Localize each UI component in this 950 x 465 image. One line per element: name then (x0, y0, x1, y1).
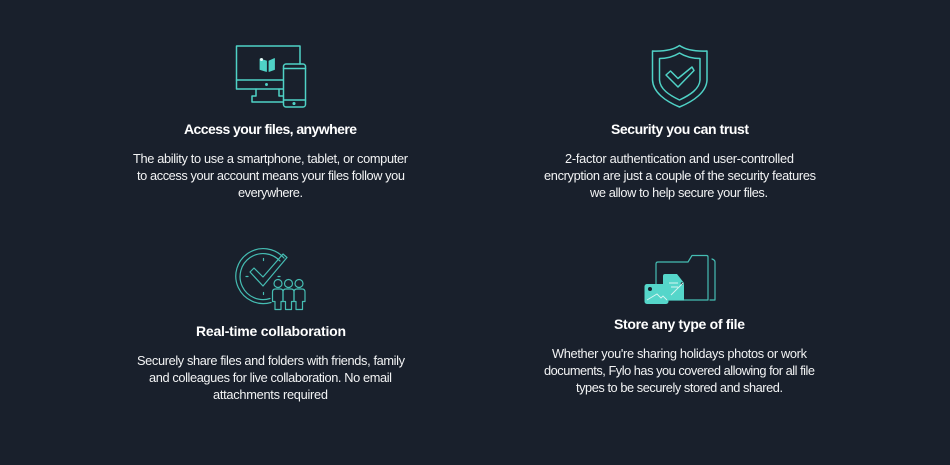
heading: Security you can trust (611, 121, 749, 137)
panel: access your files (133, 46, 409, 200)
body text: attachments required (213, 387, 328, 402)
body text: to access your account means your files follow you (137, 168, 405, 183)
body text: encryption are just a couple of the security features (544, 168, 816, 183)
body text (133, 151, 409, 200)
icon: clock with check and people (236, 249, 305, 310)
heading: Access your files, anywhere (184, 121, 357, 137)
body text (137, 353, 406, 402)
body text (544, 346, 815, 395)
body text: documents, Fylo has you covered allowing for all file (544, 363, 815, 378)
icon: monitor and phone (236, 46, 306, 107)
heading: Store any type of file (614, 316, 745, 332)
body text: Securely share files and folders with friends, family (137, 353, 406, 368)
icon: shield with check (652, 46, 707, 107)
panel: store any file (544, 256, 815, 395)
body text: Whether you're sharing holidays photos or work (552, 346, 808, 361)
body text (544, 151, 816, 200)
icon: folder with photo and document (644, 256, 715, 304)
body text: we allow to help secure your files. (589, 185, 768, 200)
body text: The ability to use a smartphone, tablet, or computer (133, 151, 409, 166)
body text: and colleagues for live collaboration. No email (149, 370, 392, 385)
panel: security (544, 46, 816, 200)
body text: everywhere. (238, 185, 303, 200)
body text: types to be securely stored and shared. (576, 380, 783, 395)
panel: collaboration (137, 249, 406, 402)
body text: 2-factor authentication and user-controlled (565, 151, 794, 166)
heading: Real-time collaboration (196, 323, 346, 339)
